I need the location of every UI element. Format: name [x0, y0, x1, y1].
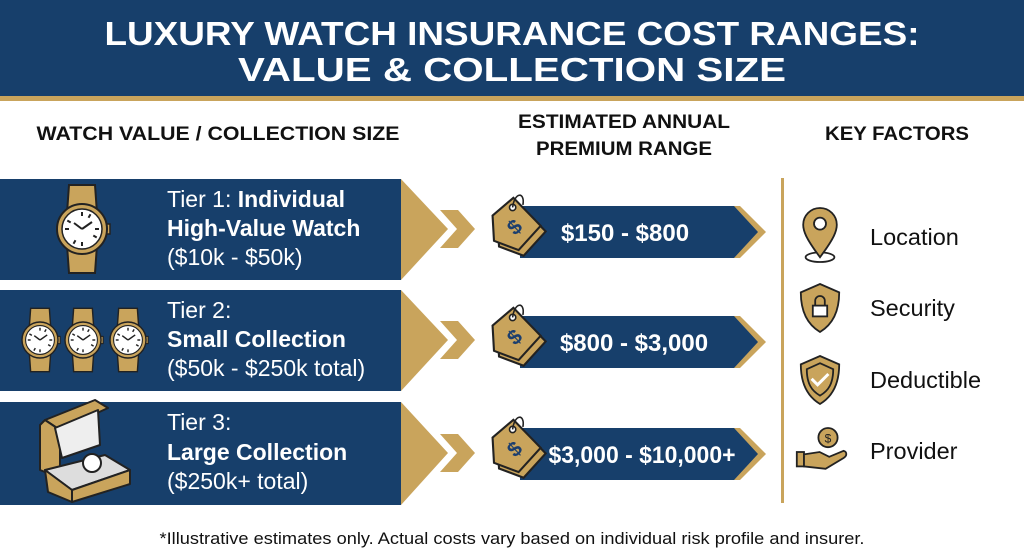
- column heading: key factors: KEY FACTORS: [825, 124, 969, 145]
- tier 2 text: Small Collection: [167, 326, 346, 352]
- factor: security: Security: [870, 295, 955, 321]
- icon: watch: [57, 185, 110, 273]
- factor: provider: [797, 428, 958, 469]
- column heading: premium: ESTIMATED ANNUAL: [518, 112, 730, 133]
- icon: price tag: [488, 414, 549, 482]
- factor: location: Location: [870, 224, 959, 250]
- premium bar 3: [488, 414, 766, 482]
- icon: check shield: [801, 356, 839, 404]
- factor: provider: Provider: [870, 438, 958, 464]
- title: VALUE & COLLECTION SIZE: [238, 51, 786, 88]
- tier 1 text: High-Value Watch: [167, 215, 360, 241]
- premium bar 3: $3,000 - $10,000+: [548, 442, 736, 469]
- tier 1 text: Tier 1: Individual: [167, 186, 345, 212]
- tier 3 row: [0, 400, 475, 505]
- header banner: [0, 0, 1024, 101]
- arrow chevron: [440, 321, 475, 359]
- icon: watch box: [40, 400, 130, 502]
- icon: hand with coin: [797, 428, 846, 469]
- arrow chevron: [440, 434, 475, 472]
- column heading: premium: PREMIUM RANGE: [536, 139, 712, 160]
- tier 2 text: Tier 2:: [167, 297, 231, 323]
- tier 2 row: [0, 290, 475, 391]
- title: LUXURY WATCH INSURANCE COST RANGES:: [104, 15, 920, 52]
- icon: hand with coin: $: [825, 431, 832, 445]
- tier 3 text: Tier 3:: [167, 409, 231, 435]
- title: [104, 15, 920, 88]
- factor: deductible: [801, 356, 981, 404]
- icon: map pin: [803, 208, 837, 262]
- arrow chevron: [440, 210, 475, 248]
- footnote: *Illustrative estimates only. Actual costs vary based on individual risk profile and insurer.: [160, 529, 864, 548]
- column heading: watch value: WATCH VALUE / COLLECTION SIZE: [36, 124, 399, 145]
- tier 3 text: ($250k+ total): [167, 468, 308, 494]
- premium bar 1: $150 - $800: [561, 220, 689, 247]
- tier 3 text: Large Collection: [167, 439, 347, 465]
- premium bar 1: [488, 192, 766, 260]
- factor: deductible: Deductible: [870, 367, 981, 393]
- icon: three watches: [22, 308, 148, 372]
- premium bar 2: [488, 302, 766, 370]
- tier 2 text: [167, 297, 365, 381]
- icon: price tag: [488, 192, 549, 260]
- column heading: premium: [518, 112, 730, 160]
- icon: lock shield: [801, 284, 839, 332]
- tier 1 text: [167, 186, 360, 270]
- factor: location: [803, 208, 959, 262]
- icon: price tag: [488, 302, 549, 370]
- tier 2 text: ($50k - $250k total): [167, 355, 365, 381]
- factor: security: [801, 284, 955, 332]
- tier 3 text: [167, 409, 347, 494]
- tier 1 text: ($10k - $50k): [167, 244, 303, 270]
- tier 1 row: [0, 179, 475, 280]
- premium bar 2: $800 - $3,000: [560, 330, 708, 357]
- divider: [781, 178, 784, 503]
